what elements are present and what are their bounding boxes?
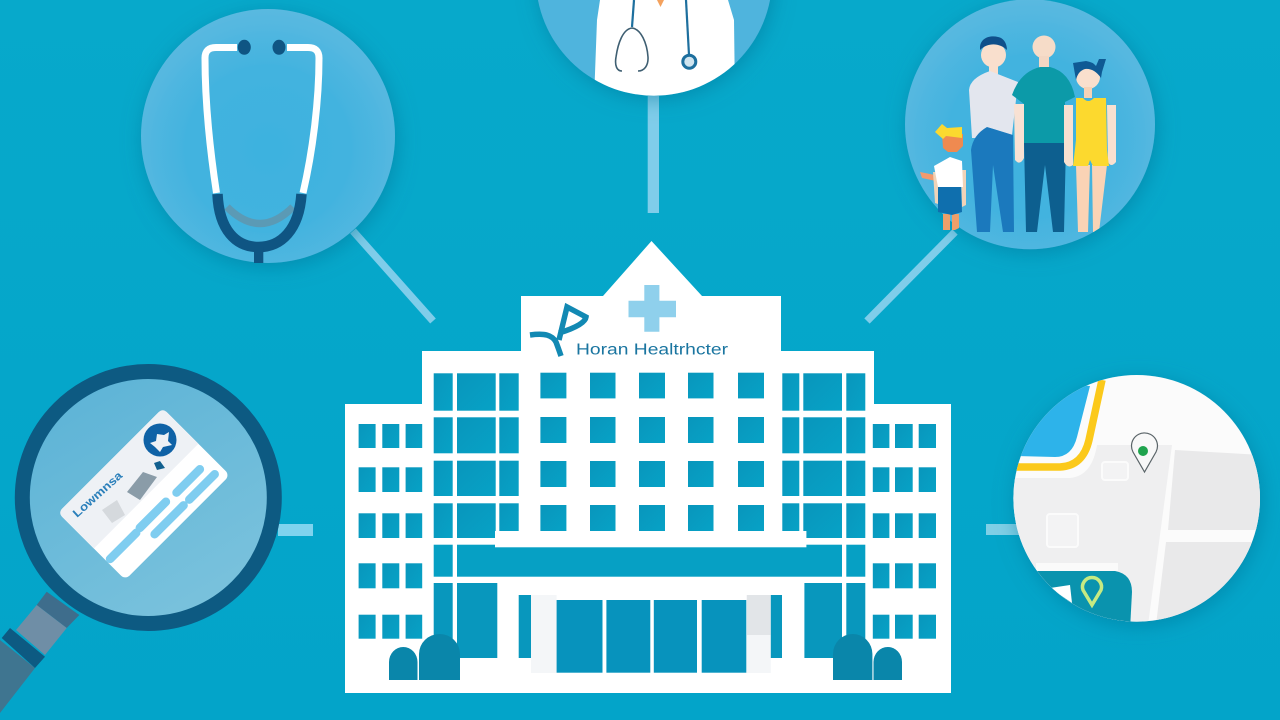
- icon: stethoscope circle: [141, 9, 395, 263]
- man with teal shirt: [1012, 36, 1075, 232]
- icon: map circle: [1000, 375, 1262, 630]
- stethoscope grey arc: [227, 207, 293, 224]
- map building squares: [1047, 462, 1128, 547]
- icon: family circle: [905, 0, 1155, 249]
- man with white shirt: [969, 36, 1018, 232]
- lower side glazing: [434, 583, 865, 658]
- white canopy ledge: [495, 531, 806, 547]
- magnifier handle: [0, 592, 79, 713]
- doctor neck: [657, 0, 664, 7]
- map yellow road: [1010, 380, 1102, 467]
- map white triangle: [1050, 585, 1072, 603]
- map green location marker: [1083, 577, 1102, 605]
- right mid-wing windows: [782, 373, 865, 538]
- card blue bars: [109, 464, 215, 569]
- stethoscope dark yoke: [218, 194, 302, 247]
- connector: map to hospital: [986, 524, 1020, 535]
- icon: magnifying glass with insurance card: [0, 372, 274, 713]
- centre cross: [628, 285, 676, 332]
- hospital building: [345, 241, 951, 693]
- right wing windows: [873, 424, 936, 639]
- map blocks right: [1156, 450, 1262, 625]
- left wing windows: [359, 424, 422, 639]
- connector: family to hospital: [867, 232, 955, 321]
- left mid-wing windows: [434, 373, 519, 538]
- connector: insurance card to hospital: [278, 524, 313, 536]
- right bushes: [833, 634, 902, 680]
- canopy band: [434, 545, 865, 577]
- card text: Lowmnsa: [71, 469, 126, 520]
- insurance card: [58, 408, 230, 580]
- stethoscope white tubes: [205, 48, 319, 193]
- map location pin: [1132, 433, 1158, 472]
- hospital logo: [530, 307, 586, 356]
- card photo: [102, 500, 125, 523]
- connector: doctor to hospital: [648, 96, 659, 213]
- woman in yellow dress: [1064, 59, 1116, 232]
- map water: [1021, 386, 1090, 457]
- icon: doctor circle: [536, 0, 772, 100]
- card chip: [127, 472, 157, 500]
- map grey land: [1000, 445, 1172, 625]
- hospital sign text: Horan Healtrhcter: [576, 342, 728, 358]
- entrance pillars slats: [519, 595, 782, 658]
- map white road: [1036, 563, 1118, 571]
- centre windows: [540, 373, 764, 531]
- stethoscope earpieces: [238, 40, 286, 55]
- doctor white coat: [594, 0, 735, 100]
- map teal area: [1037, 571, 1132, 622]
- stethoscope stem: [254, 247, 263, 263]
- entrance doors: [557, 600, 746, 673]
- entrance shading: [531, 595, 771, 673]
- child: [920, 124, 966, 230]
- card logo: [144, 424, 176, 470]
- magnifier lens: [22, 372, 274, 624]
- doctor stethoscope: [616, 0, 696, 71]
- building silhouette: [345, 241, 951, 693]
- entrance grey panel: [747, 595, 770, 635]
- connector: stethoscope to hospital: [353, 231, 433, 321]
- left bushes: [389, 634, 460, 680]
